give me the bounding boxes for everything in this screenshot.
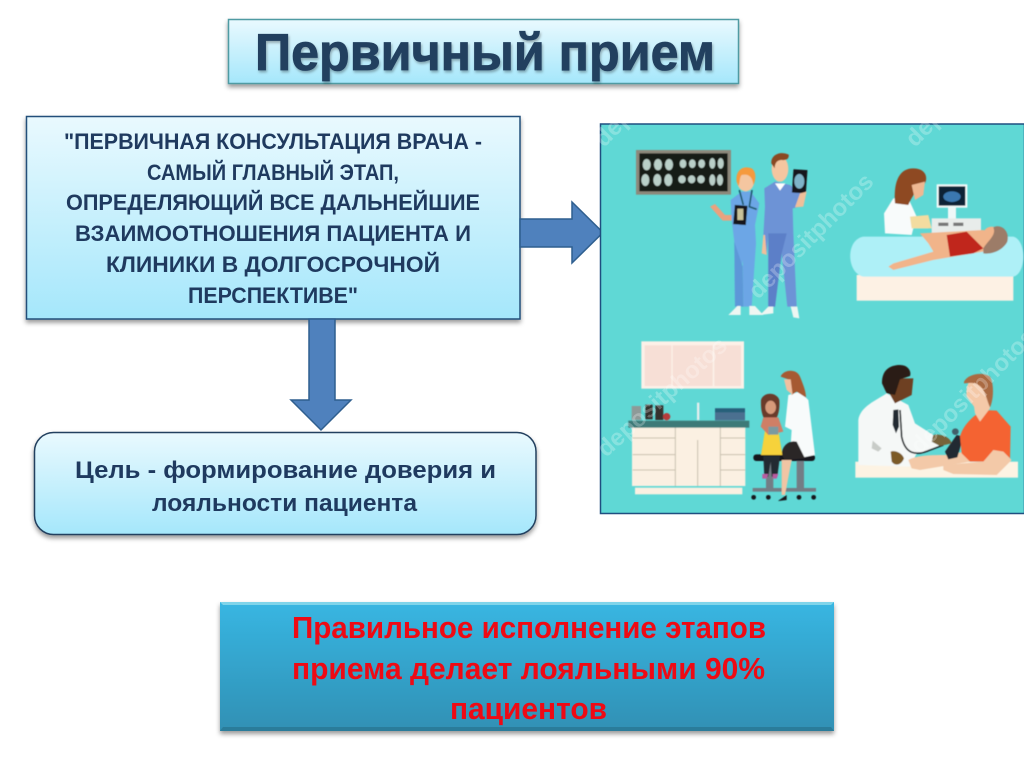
watermark: depositphotos (592, 332, 733, 462)
scene: clinic cabinet and child (628, 341, 816, 501)
panel: quote about the first consultation: ОПРЕДЕЛЯЮЩИЙ ВСЕ ДАЛЬНЕЙШИЕ (66, 190, 480, 215)
title: Первичный прием (255, 24, 715, 82)
illustration: medical scenes (589, 103, 1024, 514)
child (761, 420, 782, 455)
panel: conclusion (220, 602, 834, 731)
panel: conclusion: приема делает лояльными 90% (292, 651, 765, 686)
doctor woman (785, 392, 815, 457)
arrow: right to illustration (520, 202, 603, 263)
panel: conclusion: Правильное исполнение этапов (292, 610, 766, 645)
panel: quote about the first consultation: КЛИНИКИ В ДОЛГОСРОЧНОЙ (106, 252, 440, 277)
watermark: dep (900, 103, 949, 152)
panel: goal: лояльности пациента (152, 490, 418, 517)
watermark (589, 103, 1024, 462)
stool (753, 454, 816, 492)
panel: goal (34, 432, 536, 534)
scene: ultrasound (850, 168, 1023, 301)
panel: goal: Цель - формирование доверия и (75, 457, 496, 484)
panel: quote about the first consultation (26, 116, 520, 319)
panel: quote about the first consultation: ПЕРСПЕКТИВЕ" (188, 283, 358, 308)
scene: doctors with x-ray board (636, 150, 807, 318)
panel: quote about the first consultation: "ПЕРВИЧНАЯ КОНСУЛЬТАЦИЯ ВРАЧА - (64, 129, 482, 154)
watermark: depositphotos (743, 168, 879, 304)
watermark: dep (589, 103, 638, 152)
arrow: down to goal (291, 319, 351, 430)
panel: quote about the first consultation: ВЗАИМООТНОШЕНИЯ ПАЦИЕНТА И (75, 221, 471, 246)
nurse (710, 204, 732, 221)
panel: conclusion: пациентов (450, 691, 607, 726)
doctor (762, 182, 803, 307)
panel: quote about the first consultation: САМЫЙ ГЛАВНЫЙ ЭТАП, (147, 160, 399, 185)
scene: blood pressure (855, 365, 1018, 478)
